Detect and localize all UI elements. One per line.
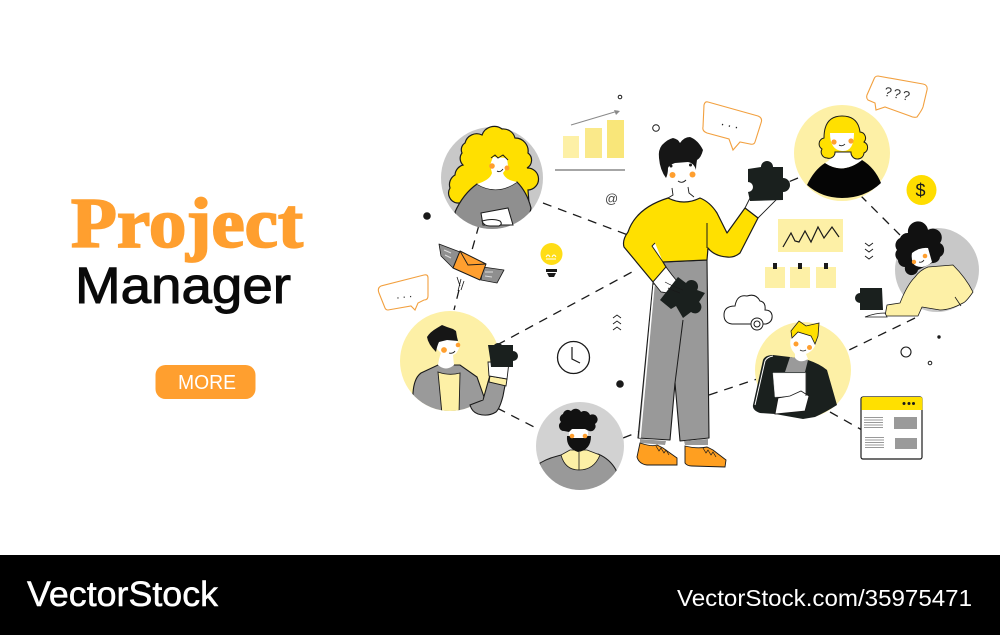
neck and face (436, 336, 459, 368)
person: dark curly hair with puzzle piece (855, 221, 979, 317)
hand (865, 313, 887, 317)
torso and arm (885, 265, 973, 316)
trousers (638, 260, 709, 441)
puzzle piece: upper (748, 161, 790, 201)
neck and face (667, 158, 700, 202)
speech bubble: left: ... (395, 286, 416, 302)
icon: winged envelope (439, 244, 504, 291)
heading: Manager: Manager (75, 257, 291, 314)
sweater (624, 198, 758, 282)
hair (819, 116, 868, 159)
neck (825, 150, 862, 168)
shirt collar (561, 450, 600, 470)
hair (791, 321, 819, 344)
speech bubble: top center: ... (720, 113, 744, 132)
icon: light bulb (540, 243, 562, 277)
puzzle piece (855, 288, 883, 310)
paper and hand (481, 208, 513, 225)
icon: browser window (861, 397, 922, 459)
person: man with puzzle piece, yellow circle (400, 311, 518, 415)
shirt (785, 357, 808, 372)
footer logo: VectorStock (27, 575, 219, 614)
speech bubble: question marks (867, 76, 927, 117)
neck and face (477, 157, 517, 190)
icon: down chevrons (865, 243, 873, 259)
jacket (753, 355, 837, 419)
neck and face (790, 330, 816, 361)
torso (807, 160, 881, 198)
paper (773, 373, 806, 397)
sticky notes (765, 263, 836, 288)
icon: cloud (724, 295, 772, 330)
face (830, 133, 854, 151)
chart panel: line graph (778, 219, 843, 252)
t-shirt and jacket (412, 364, 484, 411)
person: woman with blonde bob (794, 105, 890, 201)
button: more: MORE (178, 372, 236, 394)
torso (455, 182, 531, 232)
face (912, 248, 932, 267)
puzzle piece: lower (660, 277, 705, 318)
icon: up chevrons (613, 315, 621, 330)
button: more (156, 365, 256, 399)
puzzle piece (488, 343, 518, 367)
beard and face (567, 436, 591, 452)
icon: clock (558, 342, 590, 374)
icon: dollar coin (906, 175, 936, 205)
sleeve (470, 375, 507, 415)
sleeve and hand (775, 391, 809, 414)
hair (659, 137, 703, 178)
icon: at sign: @ (605, 191, 618, 206)
person: blond man with document (753, 321, 851, 419)
speech bubble: top center (703, 102, 762, 150)
main figure: project manager holding puzzle pieces (624, 137, 790, 467)
hair (895, 221, 944, 275)
person: curly blonde woman (441, 126, 543, 232)
speech bubble: left (378, 275, 428, 310)
icon: dollar coin: $ (916, 180, 926, 200)
hair (449, 126, 539, 203)
small decorative dots (423, 95, 941, 388)
shoes (637, 443, 677, 465)
speech bubble: question marks: ??? (883, 84, 913, 104)
right hand (745, 198, 778, 218)
footer bar (0, 555, 1000, 635)
chart: growing bars (555, 110, 625, 170)
hair (559, 409, 598, 432)
heading: Project: Project (71, 185, 303, 263)
dashed connector lines (454, 178, 915, 438)
hair (427, 325, 458, 352)
person: bearded man (535, 402, 624, 495)
lower hand (653, 267, 685, 295)
footer url: VectorStock.com/35975471 (677, 585, 972, 611)
torso (540, 454, 616, 490)
